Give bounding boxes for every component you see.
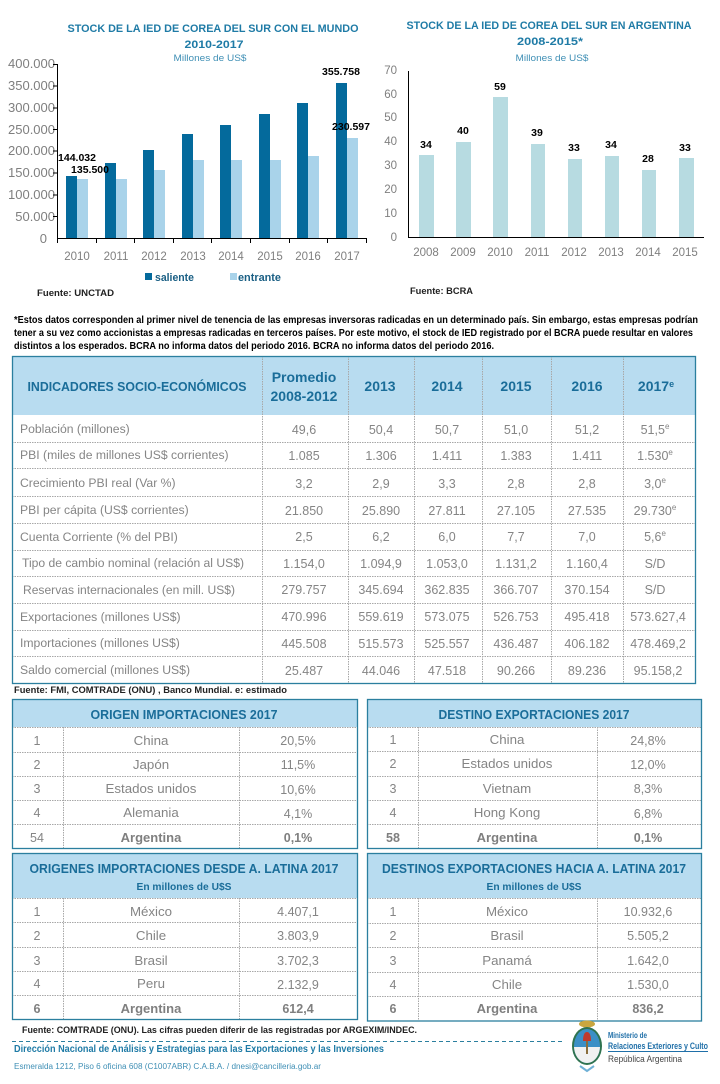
table: destino exportaciones: 4 bbox=[390, 806, 397, 820]
table: orígenes importaciones desde A. Latina: 2.132,9 bbox=[277, 978, 319, 992]
row: población: 50,4 bbox=[369, 423, 393, 437]
data labels: 28 bbox=[642, 153, 654, 165]
y axis labels: 150.000 bbox=[8, 165, 55, 180]
data labels: 355.758 bbox=[322, 66, 360, 78]
table: origen importaciones: 4,1% bbox=[284, 807, 312, 821]
title: world stock: 2010-2017 bbox=[184, 39, 244, 51]
data labels bbox=[58, 66, 370, 176]
y axis labels: 0 bbox=[40, 231, 47, 246]
table: destinos exportaciones hacia A. Latina: 1 bbox=[390, 905, 397, 919]
source: trade tables: Fuente: COMTRADE (ONU). Las cifras pueden diferir de las registradas por ARGEXIM/INDEC. bbox=[22, 1025, 417, 1036]
row: cuenta corriente bbox=[20, 529, 666, 544]
table: orígenes importaciones desde A. Latina: Chile bbox=[136, 928, 166, 943]
row: PBI: 1.411 bbox=[572, 449, 602, 463]
table: orígenes importaciones desde A. Latina: Argentina bbox=[121, 1001, 182, 1016]
table: destinos exportaciones hacia A. Latina: 2 bbox=[390, 929, 397, 943]
title: Argentina stock: 2008-2015* bbox=[517, 36, 584, 48]
row: reservas: 279.757 bbox=[281, 583, 327, 597]
table: orígenes importaciones desde A. Latina: 3.803,9 bbox=[277, 929, 319, 943]
panel: world FDI stock chart bbox=[8, 23, 370, 299]
y axis labels: 40 bbox=[384, 136, 397, 148]
x axis labels: 2011 bbox=[104, 251, 128, 263]
row: PBI: 1.306 bbox=[365, 449, 397, 463]
row: tipo de cambio: 1.094,9 bbox=[360, 557, 402, 571]
row: saldo comercial: 89.236 bbox=[568, 664, 606, 678]
row: tipo de cambio: 1.131,2 bbox=[495, 557, 537, 571]
y axis labels: 350.000 bbox=[8, 78, 55, 93]
table: orígenes importaciones desde A. Latina: México bbox=[130, 904, 172, 919]
footer: issuing office: Esmeralda 1212, Piso 6 oficina 608 (C1007ABR) C.A.B.A. / dnesi@cancilleria.gob.ar bbox=[14, 1062, 321, 1071]
x axis labels: 2014 bbox=[218, 251, 244, 263]
row: crecimiento: 3,3 bbox=[438, 477, 456, 491]
x axis labels: 2015 bbox=[257, 251, 283, 263]
table: destino exportaciones: 3 bbox=[390, 782, 397, 796]
table: destino exportaciones: DESTINO EXPORTACIONES 2017 bbox=[438, 708, 630, 722]
title: world stock: Millones de US$ bbox=[174, 53, 247, 64]
table: destino exportaciones: Estados unidos bbox=[462, 756, 553, 771]
ministry name: República Argentina bbox=[608, 1054, 683, 1065]
x axis labels: 2009 bbox=[450, 247, 476, 259]
table: origen importaciones: Alemania bbox=[123, 805, 179, 820]
y axis labels: 20 bbox=[384, 184, 397, 196]
row: exportaciones: 573.075 bbox=[424, 610, 470, 624]
footnote bbox=[14, 315, 698, 352]
row: crecimiento: 2,8 bbox=[507, 477, 525, 491]
row: PBI per cápita: 25.890 bbox=[362, 504, 400, 518]
row: PBI per cápita: 27.105 bbox=[497, 504, 535, 518]
row: tipo de cambio bbox=[22, 556, 665, 571]
row: importaciones: 525.557 bbox=[424, 637, 470, 651]
row: importaciones: 478.469,2 bbox=[630, 637, 686, 651]
table: destinos exportaciones hacia A. Latina: 3 bbox=[390, 954, 397, 968]
row: reservas: 345.694 bbox=[358, 583, 404, 597]
row: exportaciones: Exportaciones (millones US$) bbox=[20, 610, 181, 624]
table: destino exportaciones: Hong Kong bbox=[474, 805, 540, 820]
row: saldo comercial: 95.158,2 bbox=[634, 664, 682, 678]
row: cuenta corriente: 6,2 bbox=[372, 530, 390, 544]
table: origen importaciones: Argentina bbox=[121, 830, 182, 845]
source: indicators: Fuente: FMI, COMTRADE (ONU) , Banco Mundial. e: estimado bbox=[14, 685, 287, 696]
table: orígenes importaciones desde A. Latina: 2 bbox=[34, 929, 41, 943]
row: importaciones: Importaciones (millones US$) bbox=[20, 636, 180, 650]
bars: entrante bbox=[77, 138, 358, 238]
footer: issuing office bbox=[14, 1044, 384, 1071]
table: orígenes importaciones desde A. Latina: 3 bbox=[34, 954, 41, 968]
row: importaciones: 406.182 bbox=[564, 637, 610, 651]
table: destinos exportaciones hacia A. Latina: México bbox=[486, 904, 528, 919]
table: destinos exportaciones hacia A. Latina: 5.505,2 bbox=[627, 929, 669, 943]
x axis labels: 2013 bbox=[180, 251, 206, 263]
y axis labels: 400.000 bbox=[8, 56, 55, 71]
row: tipo de cambio: 1.053,0 bbox=[426, 557, 468, 571]
legend: entrante bbox=[238, 272, 281, 284]
table: origen importaciones: 1 bbox=[34, 734, 41, 748]
row: saldo comercial: 44.046 bbox=[362, 664, 400, 678]
icon: national crest bbox=[572, 1020, 602, 1071]
table: destinos exportaciones hacia A. Latina: Brasil bbox=[490, 928, 524, 943]
title: world stock bbox=[68, 23, 359, 64]
x axis labels: 2016 bbox=[295, 251, 321, 263]
row: cuenta corriente: 6,0 bbox=[438, 530, 456, 544]
axes bbox=[408, 71, 704, 238]
title: Argentina stock bbox=[406, 20, 692, 64]
y axis labels: 70 bbox=[384, 65, 397, 77]
source: Fuente: UNCTAD bbox=[37, 288, 114, 299]
table: destino exportaciones: 12,0% bbox=[630, 758, 666, 772]
data labels: 34 bbox=[605, 139, 617, 151]
row: PBI: 1.411 bbox=[432, 449, 462, 463]
table: destino exportaciones bbox=[367, 699, 702, 849]
table: origen importaciones: 0,1% bbox=[284, 831, 312, 845]
row: cuenta corriente: 7,0 bbox=[578, 530, 596, 544]
data labels bbox=[420, 81, 691, 165]
table: orígenes importaciones desde A. Latina: 612,4 bbox=[282, 1002, 314, 1016]
y axis labels bbox=[8, 56, 55, 246]
table header: 2015 bbox=[500, 378, 532, 394]
row: población: Población (millones) bbox=[20, 422, 130, 436]
table: destino exportaciones: 6,8% bbox=[634, 807, 662, 821]
row: población: 50,7 bbox=[435, 423, 459, 437]
y axis labels: 200.000 bbox=[8, 143, 55, 158]
logo: ministry bbox=[572, 1020, 708, 1071]
data labels: 59 bbox=[494, 81, 506, 93]
row: exportaciones: 573.627,4 bbox=[630, 610, 686, 624]
row: PBI: e bbox=[668, 448, 673, 457]
table: destinos exportaciones hacia A. Latina: Argentina bbox=[477, 1001, 538, 1016]
row: reservas: S/D bbox=[645, 583, 665, 597]
row: saldo comercial: 90.266 bbox=[497, 664, 535, 678]
data labels: 34 bbox=[420, 139, 432, 151]
row: reservas: 370.154 bbox=[564, 583, 610, 597]
table: orígenes importaciones desde A. Latina: Peru bbox=[137, 976, 165, 991]
row: PBI per cápita: 21.850 bbox=[285, 504, 323, 518]
table: orígenes importaciones desde A. Latina bbox=[12, 853, 358, 1020]
row: población: 51,2 bbox=[575, 423, 599, 437]
axes bbox=[53, 64, 366, 243]
table: orígenes importaciones desde A. Latina: Brasil bbox=[134, 953, 168, 968]
row: crecimiento: e bbox=[661, 476, 666, 485]
row: población: e bbox=[665, 422, 670, 431]
table: origen importaciones: 54 bbox=[30, 831, 44, 845]
table: destino exportaciones: China bbox=[490, 732, 525, 747]
table: destinos exportaciones hacia A. Latina: 1.642,0 bbox=[627, 954, 669, 968]
x axis labels: 2010 bbox=[64, 251, 90, 263]
table: destinos exportaciones hacia A. Latina: 10.932,6 bbox=[624, 905, 672, 919]
legend: saliente bbox=[155, 272, 194, 284]
panel: Argentina FDI stock chart bbox=[384, 20, 704, 297]
row: PBI per cápita: PBI per cápita (US$ corrientes) bbox=[20, 503, 189, 517]
table: destino exportaciones: 2 bbox=[390, 757, 397, 771]
table: orígenes importaciones desde A. Latina: 1 bbox=[34, 905, 41, 919]
data labels: 144.032 bbox=[58, 152, 96, 164]
table: destino exportaciones: 1 bbox=[390, 733, 397, 747]
table header: 2016 bbox=[571, 378, 603, 394]
row: crecimiento: 2,9 bbox=[372, 477, 390, 491]
y axis labels: 0 bbox=[391, 232, 397, 244]
table: destinos exportaciones hacia A. Latina: 4 bbox=[390, 978, 397, 992]
table: orígenes importaciones desde A. Latina: ORIGENES IMPORTACIONES DESDE A. LATINA 2017 bbox=[30, 862, 339, 876]
title: Argentina stock: STOCK DE LA IED DE COREA DEL SUR EN ARGENTINA bbox=[406, 20, 692, 32]
y axis labels: 50.000 bbox=[15, 209, 55, 224]
table: origen importaciones: 3 bbox=[34, 782, 41, 796]
row: crecimiento: 3,2 bbox=[295, 477, 313, 491]
row: crecimiento: 3,0 bbox=[644, 477, 661, 491]
x axis labels: 2015 bbox=[672, 247, 698, 259]
row: cuenta corriente: 7,7 bbox=[507, 530, 525, 544]
table header: e bbox=[669, 379, 674, 389]
table: orígenes importaciones desde A. Latina: 4.407,1 bbox=[277, 905, 319, 919]
row: PBI: 1.085 bbox=[288, 449, 320, 463]
title: Argentina stock: Millones de US$ bbox=[516, 53, 589, 64]
x axis labels: 2017 bbox=[334, 251, 360, 263]
table: orígenes importaciones desde A. Latina: 3.702,3 bbox=[277, 954, 319, 968]
data labels: 33 bbox=[568, 142, 580, 154]
row: exportaciones: 526.753 bbox=[493, 610, 539, 624]
table header bbox=[12, 356, 695, 415]
table: origen importaciones: Estados unidos bbox=[106, 781, 197, 796]
row: exportaciones: 470.996 bbox=[281, 610, 327, 624]
footnote: distintos a los esperados. BCRA no informa datos del periodo 2016. BCRA no informa datos del periodo 2016. bbox=[14, 341, 494, 352]
x axis labels bbox=[64, 251, 360, 263]
row: importaciones: 515.573 bbox=[358, 637, 404, 651]
y axis labels: 60 bbox=[384, 89, 397, 101]
data labels: 135.500 bbox=[71, 164, 109, 176]
data labels: 230.597 bbox=[332, 121, 370, 133]
data labels: 39 bbox=[531, 127, 543, 139]
table: origen importaciones: 11,5% bbox=[281, 758, 315, 772]
row: PBI per cápita: 27.811 bbox=[428, 504, 466, 518]
table header: 2014 bbox=[431, 378, 463, 394]
row: crecimiento: 2,8 bbox=[578, 477, 596, 491]
x axis labels bbox=[413, 247, 698, 259]
table: origen importaciones: China bbox=[134, 733, 169, 748]
row: PBI per cápita: e bbox=[672, 503, 677, 512]
row: población bbox=[20, 422, 670, 437]
table: origen importaciones: 4 bbox=[34, 806, 41, 820]
data labels: 40 bbox=[457, 125, 469, 137]
ministry name bbox=[608, 1031, 708, 1065]
table: destino exportaciones: 24,8% bbox=[630, 734, 666, 748]
x axis labels: 2012 bbox=[561, 247, 587, 259]
x axis labels: 2011 bbox=[525, 247, 549, 259]
row: PBI: 1.383 bbox=[500, 449, 532, 463]
table: destino exportaciones: Vietnam bbox=[483, 781, 531, 796]
row: importaciones bbox=[20, 636, 686, 651]
table: destinos exportaciones hacia A. Latina: DESTINOS EXPORTACIONES HACIA A. LATINA 2017 bbox=[382, 862, 686, 876]
table: origen importaciones bbox=[12, 699, 358, 848]
row: tipo de cambio: Tipo de cambio nominal (relación al US$) bbox=[22, 556, 244, 570]
table header: Promedio bbox=[272, 369, 336, 385]
title: world stock: STOCK DE LA IED DE COREA DEL SUR CON EL MUNDO bbox=[68, 23, 359, 35]
row: tipo de cambio: S/D bbox=[645, 557, 665, 571]
row: saldo comercial: 25.487 bbox=[285, 664, 323, 678]
row: PBI per cápita: 29.730 bbox=[634, 504, 672, 518]
x axis labels: 2013 bbox=[598, 247, 624, 259]
x axis labels: 2012 bbox=[141, 251, 167, 263]
row: saldo comercial bbox=[20, 663, 682, 678]
table: destinos exportaciones hacia A. Latina bbox=[367, 853, 702, 1021]
table: destinos exportaciones hacia A. Latina: 6 bbox=[390, 1002, 397, 1016]
row: saldo comercial: 47.518 bbox=[428, 664, 466, 678]
y axis labels: 30 bbox=[384, 160, 397, 172]
row: población: 51,5 bbox=[641, 423, 665, 437]
table: origen importaciones: 10,6% bbox=[280, 783, 316, 797]
table: origen importaciones: 2 bbox=[34, 758, 41, 772]
row: PBI bbox=[20, 448, 673, 463]
x axis labels: 2010 bbox=[487, 247, 513, 259]
y axis labels: 50 bbox=[384, 112, 397, 124]
row: crecimiento bbox=[20, 476, 666, 491]
table: destinos exportaciones hacia A. Latina: En millones de U$S bbox=[486, 881, 582, 893]
row: exportaciones: 495.418 bbox=[564, 610, 610, 624]
row: cuenta corriente: Cuenta Corriente (% del PBI) bbox=[20, 530, 178, 544]
bars bbox=[419, 97, 694, 237]
row: saldo comercial: Saldo comercial (millones US$) bbox=[20, 663, 190, 677]
row: cuenta corriente: e bbox=[661, 529, 666, 538]
table: destinos exportaciones hacia A. Latina: Chile bbox=[492, 977, 522, 992]
table header: INDICADORES SOCIO-ECONÓMICOS bbox=[28, 379, 246, 394]
y axis labels: 300.000 bbox=[8, 100, 55, 115]
table: orígenes importaciones desde A. Latina: En millones de U$S bbox=[136, 881, 232, 893]
table header: 2017 bbox=[638, 378, 669, 394]
table: origen importaciones: 20,5% bbox=[280, 734, 316, 748]
y axis labels: 100.000 bbox=[8, 187, 55, 202]
footer: issuing office: Dirección Nacional de Análisis y Estrategias para las Exportaciones y las Inversiones bbox=[14, 1044, 384, 1055]
y axis labels bbox=[384, 65, 397, 244]
table: origen importaciones: ORIGEN IMPORTACIONES 2017 bbox=[90, 708, 278, 722]
row: PBI: PBI (miles de millones US$ corrientes) bbox=[20, 448, 229, 462]
row: cuenta corriente: 2,5 bbox=[295, 530, 313, 544]
row: reservas: 362.835 bbox=[424, 583, 470, 597]
row: exportaciones bbox=[20, 610, 686, 624]
y axis labels: 10 bbox=[384, 208, 397, 220]
table: orígenes importaciones desde A. Latina: 4 bbox=[34, 977, 41, 991]
row: PBI per cápita bbox=[20, 503, 677, 518]
row: importaciones: 445.508 bbox=[281, 637, 327, 651]
table: destino exportaciones: Argentina bbox=[477, 830, 538, 845]
table: socio-economic indicators bbox=[12, 356, 696, 684]
row: cuenta corriente: 5,6 bbox=[644, 530, 661, 544]
row: tipo de cambio: 1.154,0 bbox=[283, 557, 325, 571]
row: reservas bbox=[23, 583, 665, 597]
table header: 2013 bbox=[364, 378, 396, 394]
table: orígenes importaciones desde A. Latina: 6 bbox=[34, 1002, 41, 1016]
data labels: 33 bbox=[679, 142, 691, 154]
x axis labels: 2008 bbox=[413, 247, 439, 259]
row: exportaciones: 559.619 bbox=[358, 610, 404, 624]
table header: 2008-2012 bbox=[271, 388, 338, 404]
row: PBI per cápita: 27.535 bbox=[568, 504, 606, 518]
table: destino exportaciones: 8,3% bbox=[634, 782, 662, 796]
row: tipo de cambio: 1.160,4 bbox=[566, 557, 608, 571]
row: reservas: 366.707 bbox=[493, 583, 539, 597]
table: destino exportaciones: 58 bbox=[386, 831, 400, 845]
table: destino exportaciones: 0,1% bbox=[634, 831, 662, 845]
table: destinos exportaciones hacia A. Latina: 1.530,0 bbox=[627, 978, 669, 992]
ministry name: Ministerio de bbox=[608, 1031, 647, 1040]
source: Fuente: BCRA bbox=[410, 286, 473, 297]
y axis labels: 250.000 bbox=[8, 122, 55, 137]
table: destinos exportaciones hacia A. Latina: Panamá bbox=[482, 953, 532, 968]
row: crecimiento: Crecimiento PBI real (Var %) bbox=[20, 476, 176, 490]
legend bbox=[145, 272, 281, 284]
table: origen importaciones: Japón bbox=[133, 757, 169, 772]
row: PBI: 1.530 bbox=[637, 449, 668, 463]
row: población: 51,0 bbox=[504, 423, 528, 437]
row: reservas: Reservas internacionales (en mill. US$) bbox=[23, 583, 235, 597]
table: destinos exportaciones hacia A. Latina: 836,2 bbox=[632, 1002, 664, 1016]
row: población: 49,6 bbox=[292, 423, 316, 437]
row: importaciones: 436.487 bbox=[493, 637, 539, 651]
x axis labels: 2014 bbox=[635, 247, 661, 259]
bars: saliente bbox=[66, 83, 347, 238]
